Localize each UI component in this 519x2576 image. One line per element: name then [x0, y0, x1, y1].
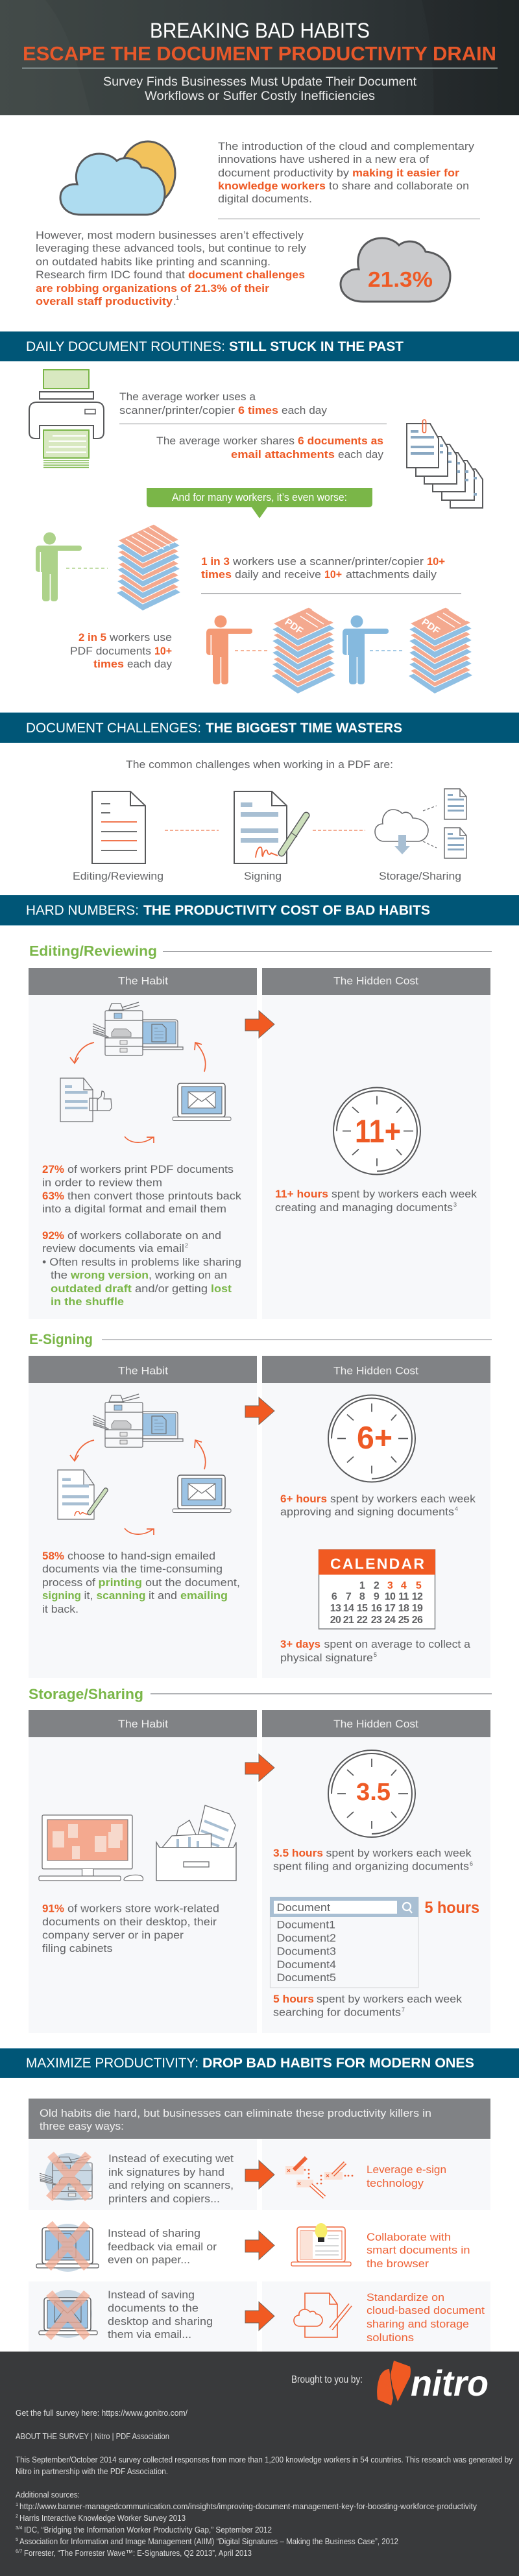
banner: maximize productivity: MAXIMIZE PRODUCTIVITY: — [26, 2055, 199, 2071]
subtitle — [103, 75, 417, 103]
icon: crossed-out copier — [40, 2153, 93, 2201]
calendar: 5 — [416, 1580, 422, 1591]
intro text: making it easier for — [352, 167, 459, 179]
footer notes: IDC, “Bridging the Information Worker Productivity Gap,” September 2012 — [24, 2525, 272, 2534]
solution text: Standardize on — [367, 2291, 444, 2304]
challenge labels: Signing — [244, 870, 282, 882]
calendar: 21 — [343, 1615, 354, 1626]
arrow — [245, 1011, 274, 1038]
text: common challenges: The common challenges when working in a PDF are: — [126, 758, 393, 771]
text: email attachments: 6 documents as — [298, 435, 383, 447]
second paragraph: 1 — [176, 295, 179, 301]
panel: storage/sharing — [29, 1686, 492, 2033]
calendar: 20 — [330, 1615, 341, 1626]
footer notes: 6/7 — [16, 2548, 22, 2554]
text: desktop and sharing — [108, 2315, 213, 2328]
habit text: wrong version — [70, 1269, 149, 1281]
intro text: knowledge workers — [218, 180, 326, 192]
icon: signing document — [234, 791, 309, 863]
habit text: review documents via email — [42, 1242, 184, 1255]
calendar: 22 — [357, 1615, 368, 1626]
calendar: 19 — [412, 1603, 423, 1614]
icon: blue worker with PDF stack — [343, 607, 472, 693]
challenge labels: Storage/Sharing — [379, 870, 461, 882]
section heading: Storage/Sharing — [29, 1686, 143, 1702]
banner: document challenges — [0, 712, 519, 743]
text: 2 in 5 workers: each day — [127, 658, 172, 670]
second paragraph: leveraging these advanced tools, but continue to rely — [36, 242, 307, 254]
solution text — [367, 2163, 446, 2189]
footer — [0, 2352, 519, 2576]
text: scanner use: 6 times — [238, 404, 278, 416]
clock: 6+ hours: 6+ — [357, 1421, 392, 1456]
second paragraph: are robbing organizations of 21.3% of their — [36, 282, 269, 295]
text: ink signatures by hand — [108, 2166, 224, 2178]
text: 1 in 3 workers: times — [201, 568, 232, 581]
banner: maximize productivity — [0, 2048, 519, 2078]
cost text: spent by workers each week — [326, 1847, 472, 1859]
calendar: 10 — [385, 1591, 396, 1602]
intro text: to share and collaborate on — [329, 180, 469, 192]
column header: the hidden cost — [262, 1710, 490, 1737]
intro box: old habits die hard: Old habits die hard, but businesses can eliminate these productivity killers in — [40, 2107, 431, 2119]
solution text: Leverage e-sign — [367, 2163, 446, 2176]
subtitle: Workflows or Suffer Costly Inefficiencies — [145, 89, 375, 103]
calendar: 8 — [359, 1591, 365, 1602]
habit text: documents via the time-consuming — [42, 1563, 223, 1575]
cost text: 3 — [453, 1201, 457, 1208]
habit text: outdated draft — [51, 1282, 132, 1295]
cost text: searching: spent by workers each week — [317, 1993, 463, 2005]
habit text: signing — [42, 1589, 81, 1602]
column header: the habit — [29, 1710, 257, 1737]
cost text: days: 5 — [374, 1652, 377, 1658]
solution text: sharing and storage — [367, 2318, 469, 2330]
icon: browser collaboration — [291, 2223, 351, 2266]
challenge labels — [73, 870, 461, 882]
text: and relying on scanners, — [108, 2179, 234, 2191]
habit text: into a digital format and email them — [42, 1203, 226, 1215]
text: Instead of executing wet — [108, 2152, 234, 2165]
intro text — [218, 140, 475, 205]
title: BREAKING BAD HABITS — [150, 19, 370, 42]
habit text — [42, 1902, 219, 1955]
text: 2 in 5 workers: workers use — [109, 631, 172, 644]
second paragraph: on outdated habits like printing and scanning. — [36, 256, 271, 268]
habit text: in order to review them — [42, 1177, 162, 1188]
icon: green worker with stack — [36, 524, 180, 610]
icon: filing cabinet — [156, 1805, 236, 1881]
solution text — [367, 2231, 470, 2270]
row: e-sign — [29, 2139, 490, 2210]
text: 2 in 5 workers: 2 in 5 — [78, 631, 106, 644]
text: them via email... — [108, 2328, 191, 2341]
section heading: E-Signing — [29, 1331, 93, 1347]
arrow — [245, 2231, 274, 2259]
calendar — [319, 1549, 435, 1629]
second paragraph: . — [173, 295, 176, 307]
icon: blue worker with PDF stack: PDF — [420, 616, 442, 636]
icon: e-sign — [285, 2158, 353, 2197]
text — [108, 2227, 217, 2266]
column header: the hidden cost — [262, 1356, 490, 1383]
cost text — [273, 1847, 473, 1872]
habit text: 63% — [42, 1190, 64, 1202]
cost text: days: spent on average to collect a — [324, 1638, 471, 1650]
calendar: 9 — [374, 1591, 380, 1602]
intro text: innovations have ushered in a new era of — [218, 153, 429, 165]
second paragraph: document challenges — [188, 269, 305, 281]
habit text: process of — [42, 1576, 95, 1589]
footer notes: 2 — [16, 2513, 18, 2519]
habit text: it and — [149, 1589, 177, 1602]
text: email attachments — [156, 435, 384, 461]
text: even on paper... — [108, 2254, 190, 2266]
text: feedback via email or — [108, 2241, 217, 2253]
calendar: 24 — [385, 1615, 396, 1626]
habit text: and/or getting — [135, 1282, 208, 1295]
habit text: company server or in paper — [42, 1929, 184, 1941]
brought to you by: Brought to you by: — [291, 2374, 363, 2385]
cost text: spent by workers each week — [332, 1188, 477, 1200]
cost text — [280, 1493, 476, 1518]
icon: crossed-out laptop — [36, 2224, 99, 2272]
text: 1 in 3 workers: 1 in 3 — [201, 555, 230, 568]
cost text: days: 3+ days — [280, 1638, 320, 1650]
text: email attachments: The average worker shares — [156, 435, 295, 447]
search box: Document2 — [276, 1932, 336, 1944]
text: Instead of sharing — [108, 2227, 200, 2239]
text: 2 in 5 workers: PDF documents — [70, 645, 151, 657]
panel: editing/reviewing — [29, 943, 492, 1319]
clock: 3.5 hours — [328, 1750, 415, 1837]
icon: cloud-based document sharing — [294, 2293, 350, 2337]
column header: the hidden cost: The Hidden Cost — [333, 1365, 418, 1377]
stat cloud: 21.3% — [341, 238, 450, 302]
callout: even worse — [147, 488, 372, 518]
habit text: in the shuffle — [51, 1295, 124, 1308]
text: scanner use — [119, 391, 328, 416]
banner: hard numbers: THE PRODUCTIVITY COST OF BAD HABITS — [143, 902, 430, 918]
footer notes — [16, 2408, 513, 2558]
text: 1 in 3 workers: 10+ — [324, 568, 342, 581]
calendar: 4 — [401, 1580, 407, 1591]
calendar: 2 — [374, 1580, 380, 1591]
logo: nitro — [377, 2361, 489, 2405]
second paragraph: overall staff productivity — [36, 295, 173, 307]
header panel — [0, 0, 519, 115]
banner: daily document routines — [0, 331, 519, 361]
column header: the hidden cost: The Hidden Cost — [333, 974, 418, 987]
habit text: then convert those printouts back — [67, 1190, 242, 1202]
calendar: 15 — [357, 1603, 368, 1614]
arrow — [245, 1397, 274, 1425]
text: scanner use: The average worker uses a — [119, 391, 256, 403]
habit text: 92% — [42, 1229, 64, 1242]
footer notes: 1 — [16, 2501, 18, 2507]
habit text: of workers print PDF documents — [67, 1163, 234, 1175]
calendar: 12 — [412, 1591, 423, 1602]
footer notes: Get the full survey here: https://www.gonitro.com/ — [16, 2408, 187, 2418]
cost text: searching — [273, 1993, 463, 2019]
stat cloud: 21.3%: 21.3% — [368, 267, 433, 291]
habit text — [42, 1550, 240, 1615]
footer notes: Nitro in partnership with the PDF Association. — [16, 2466, 168, 2476]
intro text: document productivity by — [218, 167, 350, 179]
text: email attachments: each day — [338, 448, 384, 461]
habit text: it back. — [42, 1603, 78, 1615]
habit text: 91% — [42, 1902, 64, 1915]
solution text: cloud-based document — [367, 2304, 485, 2317]
cost text: creating and managing documents — [275, 1201, 453, 1214]
banner: daily document routines: STILL STUCK IN THE PAST — [229, 339, 404, 354]
calendar: 14 — [343, 1603, 354, 1614]
calendar: 3 — [387, 1580, 393, 1591]
habit text: it, — [84, 1589, 93, 1602]
habit cycle diagram — [60, 1002, 231, 1143]
solution text: smart documents in — [367, 2244, 470, 2256]
arrow — [245, 2302, 274, 2330]
banner: hard numbers: HARD NUMBERS: — [26, 902, 139, 918]
banner: document challenges: THE BIGGEST TIME WASTERS — [206, 720, 402, 736]
text: 1 in 3 workers: 10+ — [427, 555, 445, 568]
habit text: of workers collaborate on and — [67, 1229, 221, 1242]
cost text: days — [280, 1638, 471, 1664]
column header: the habit: The Habit — [118, 1718, 168, 1730]
habit text: filing cabinets — [42, 1942, 113, 1955]
clock: 11+ hours: 11+ — [355, 1113, 401, 1150]
text: 1 in 3 workers: attachments daily — [346, 568, 437, 581]
cost text: searching: searching for documents — [273, 2006, 401, 2019]
cost text: spent by workers each week — [330, 1493, 476, 1505]
calendar: 13 — [330, 1603, 341, 1614]
intro box: old habits die hard: three easy ways: — [40, 2120, 124, 2132]
calendar: CALENDAR — [330, 1556, 424, 1572]
habit cycle diagram — [58, 1394, 231, 1535]
icon: crossed-out email laptop — [39, 2290, 97, 2338]
clock: 3.5 hours: 3.5 — [356, 1779, 391, 1806]
habit text: of workers store work-related — [67, 1902, 219, 1915]
clock: 11+ hours — [333, 1087, 420, 1174]
calendar: 18 — [398, 1603, 409, 1614]
icon: cloud and sun — [60, 141, 175, 215]
text: 2 in 5 workers: times — [93, 658, 124, 670]
intro text: digital documents. — [218, 193, 312, 205]
calendar: 25 — [398, 1615, 409, 1626]
second paragraph — [36, 229, 307, 307]
headline: ESCAPE THE DOCUMENT PRODUCTIVITY DRAIN — [23, 42, 496, 65]
column header: the hidden cost: The Hidden Cost — [333, 1718, 418, 1730]
habit text: 27% — [42, 1163, 64, 1175]
footer notes: Forrester, “The Forrester Wave™: E-Signatures, Q2 2013”, April 2013 — [24, 2548, 252, 2558]
cost text: 4 — [455, 1506, 458, 1512]
calendar: 26 — [412, 1615, 423, 1626]
arrow — [245, 2160, 274, 2189]
arrow — [245, 1754, 274, 1781]
solution text: solutions — [367, 2331, 414, 2344]
cost text: searching: 5 hours — [273, 1993, 314, 2005]
icon: orange worker with PDF stack — [206, 607, 335, 693]
second paragraph: Research firm IDC found that — [36, 269, 185, 281]
icon: desktop computer — [39, 1815, 143, 1881]
icon: editing document — [92, 791, 145, 863]
text: scanner use: each day — [282, 404, 328, 416]
habit text: documents on their desktop, their — [42, 1916, 217, 1928]
footer notes: Additional sources: — [16, 2490, 80, 2499]
footer notes: 3/4 — [16, 2525, 22, 2531]
solution text: technology — [367, 2177, 424, 2189]
column header: the habit: The Habit — [118, 1365, 168, 1377]
habit text: 58% — [42, 1550, 64, 1562]
text: 1 in 3 workers: daily and receive — [235, 568, 321, 581]
solution text — [367, 2291, 485, 2344]
habit text: lost — [211, 1282, 232, 1295]
section heading: Editing/Reviewing — [29, 943, 157, 959]
text: 1 in 3 workers: workers use a scanner/printer/copier — [232, 555, 424, 568]
cost text: searching: 7 — [402, 2006, 405, 2013]
cost text: 6 — [470, 1860, 473, 1867]
calendar: 11 — [398, 1591, 409, 1602]
search box: Document1 — [276, 1919, 335, 1931]
clock: 6+ hours — [328, 1395, 415, 1482]
second paragraph: However, most modern businesses aren’t effectively — [36, 229, 304, 241]
text — [108, 2289, 213, 2341]
footer notes: 5 — [16, 2536, 18, 2542]
cost text: days: physical signature — [280, 1652, 373, 1664]
search box: Document4 — [276, 1958, 336, 1971]
banner: document challenges: DOCUMENT CHALLENGES: — [26, 720, 201, 736]
text — [108, 2152, 234, 2205]
row: collaborate — [36, 2223, 470, 2272]
challenge labels: Editing/Reviewing — [73, 870, 163, 882]
icon: printer — [29, 370, 104, 467]
banner: maximize productivity: DROP BAD HABITS FOR MODERN ONES — [202, 2055, 474, 2071]
calendar: 17 — [385, 1603, 396, 1614]
text: printers and copiers... — [108, 2193, 220, 2205]
habit text: the — [51, 1269, 67, 1281]
calendar: 23 — [371, 1615, 382, 1626]
subtitle: Survey Finds Businesses Must Update Their Document — [103, 75, 417, 89]
cost text: 11+ hours — [275, 1188, 328, 1200]
calendar: 16 — [371, 1603, 382, 1614]
icon: orange worker with PDF stack: PDF — [283, 616, 305, 636]
cost text — [275, 1188, 477, 1214]
cost text: 6+ hours — [280, 1493, 327, 1505]
habit text: printing — [99, 1576, 142, 1589]
search box — [270, 1897, 418, 1988]
intro text: The introduction of the cloud and complementary — [218, 140, 475, 152]
text: email attachments: email attachments — [231, 448, 335, 461]
habit text: out the document, — [145, 1576, 240, 1589]
text: 2 in 5 workers: 10+ — [154, 645, 172, 657]
text: 2 in 5 workers — [70, 631, 172, 670]
footer notes: Harris Interactive Knowledge Worker Survey 2013 — [19, 2513, 186, 2523]
banner: hard numbers — [0, 895, 519, 926]
habit text: emailing — [180, 1589, 228, 1602]
column header: the habit — [29, 1356, 257, 1383]
banner: daily document routines: DAILY DOCUMENT ROUTINES: — [26, 339, 225, 354]
text: documents to the — [108, 2302, 199, 2315]
column header: the habit — [29, 968, 257, 995]
text: 1 in 3 workers — [201, 555, 445, 581]
text: scanner use: scanner/printer/copier — [119, 404, 235, 416]
icon: stack of attached documents — [407, 420, 483, 508]
search box: Document3 — [276, 1945, 336, 1958]
solution text: the browser — [367, 2257, 429, 2270]
cost text: 3.5 hours — [273, 1847, 323, 1859]
column header: the hidden cost — [262, 968, 490, 995]
calendar: 7 — [346, 1591, 352, 1602]
panel: e-signing — [29, 1331, 492, 1678]
column header: the habit: The Habit — [118, 974, 168, 987]
solution text: Collaborate with — [367, 2231, 451, 2243]
search box: Document — [276, 1901, 330, 1914]
habit text: choose to hand-sign emailed — [67, 1550, 215, 1562]
search box: Document5 — [276, 1971, 336, 1984]
text: Instead of saving — [108, 2289, 195, 2301]
intro box: old habits die hard — [29, 2099, 490, 2139]
footer notes: ABOUT THE SURVEY | Nitro | PDF Association — [16, 2431, 169, 2441]
callout: even worse: And for many workers, it’s even worse: — [172, 491, 347, 503]
footer notes: http://www.banner-managedcommunication.com/insights/improving-document-management-key-for-boosting-workforce-productivity — [19, 2501, 477, 2511]
habit text: • Often results in problems like sharing — [42, 1256, 241, 1268]
footer notes: Association for Information and Image Management (AIIM) “Digital Signatures – Making the Business Case”, 2012 — [19, 2536, 398, 2546]
habit text — [42, 1163, 242, 1308]
icon: cloud storage — [375, 789, 466, 858]
5 hours figure: 5 hours — [424, 1899, 479, 1917]
cost text: spent filing and organizing documents — [273, 1860, 469, 1872]
habit text: scanning — [96, 1589, 145, 1602]
habit text: , working on an — [149, 1269, 227, 1281]
habit text: 2 — [185, 1242, 188, 1249]
calendar: 1 — [359, 1580, 365, 1591]
logo: nitro: nitro — [411, 2363, 489, 2403]
calendar: 6 — [332, 1591, 337, 1602]
cost text: approving and signing documents — [280, 1506, 454, 1518]
row: standardize — [29, 2281, 490, 2352]
